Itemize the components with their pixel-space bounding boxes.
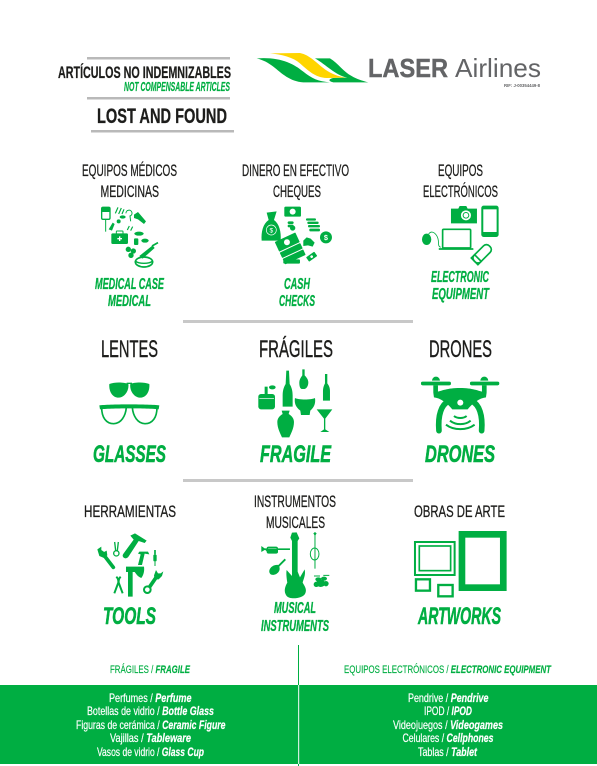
footer column: electronic equipment: Tablas / Tablet (418, 745, 478, 759)
footer column: electronic equipment: Pendrive / Pendrive (408, 691, 489, 705)
label: electronic equipment: ELECTRONIC (431, 269, 489, 286)
icon: tools (97, 533, 163, 597)
label: medical case (95, 276, 164, 310)
icon: fragile items (258, 369, 332, 437)
header title block: ARTÍCULOS NO INDEMNIZABLES (58, 63, 231, 82)
heading: equipos electrónicos: EQUIPOS (438, 161, 483, 180)
panel: cash (242, 161, 349, 310)
heading: instrumentos musicales: MUSICALES (266, 513, 325, 532)
footer column: electronic equipment: IPOD / IPOD (424, 704, 472, 718)
icon: drone (421, 377, 499, 431)
heading: dinero en efectivo: CHEQUES (273, 182, 321, 201)
footer column: fragile: Figuras de cerámica / Ceramic Figure (76, 718, 226, 732)
header title block (58, 57, 234, 132)
heading: equipos médicos: EQUIPOS MÉDICOS (82, 161, 177, 180)
panel: artworks (414, 502, 505, 630)
heading: dinero en efectivo (242, 161, 349, 201)
panel: tools (84, 502, 176, 630)
footer column: electronic equipment: Videojuegos / Videogames (393, 718, 503, 732)
label: drones: DRONES (425, 441, 495, 468)
heading: equipos médicos: MEDICINAS (100, 182, 159, 201)
panel: electronics (422, 161, 499, 303)
icon: glasses (99, 382, 159, 424)
label: cash checks (279, 276, 315, 310)
footer column: electronic equipment (344, 663, 552, 759)
label: cash checks: CASH (284, 276, 310, 293)
label: glasses: GLASSES (93, 441, 166, 468)
footer panel: lists (0, 645, 597, 766)
heading: equipos electrónicos (423, 161, 498, 201)
label: musical instruments: INSTRUMENTS (261, 618, 329, 635)
heading: drones: DRONES (429, 336, 492, 363)
footer column: fragile: FRÁGILES / FRAGILE (110, 663, 190, 676)
icon: electronics (422, 206, 499, 265)
panel: musical instruments (254, 492, 336, 635)
icon: money (262, 207, 332, 264)
heading: instrumentos musicales: INSTRUMENTOS (254, 492, 336, 511)
footer column: electronic equipment: Celulares / Cellphones (402, 731, 494, 745)
icon: musical instruments (261, 532, 329, 598)
heading: herramientas: HERRAMIENTAS (84, 502, 176, 521)
logo: LASER Airlines: LASER (368, 53, 448, 83)
logo: LASER Airlines: RIF: J-00354449-8 (504, 83, 540, 88)
logo: LASER Airlines: Airlines (455, 53, 541, 83)
label: medical case: MEDICAL CASE (95, 276, 164, 293)
heading: equipos electrónicos: ELECTRÓNICOS (423, 182, 498, 201)
header title block: NOT COMPENSABLE ARTICLES (124, 80, 230, 94)
heading: equipos médicos (82, 161, 177, 201)
footer column: electronic equipment: EQUIPOS ELECTRÓNICOS / ELECTRONIC EQUIPMENT (344, 663, 552, 676)
label: electronic equipment (431, 269, 490, 303)
panel: drones (421, 336, 499, 468)
icon: medical supplies (102, 207, 158, 267)
icon: money: $ (269, 227, 273, 234)
label: electronic equipment: EQUIPMENT (432, 286, 490, 303)
footer column: fragile: Perfumes / Perfume (109, 691, 192, 705)
heading: frágiles: FRÁGILES (259, 336, 333, 363)
label: medical case: MEDICAL (108, 293, 151, 310)
panel: fragile (258, 336, 333, 468)
label: fragile: FRAGILE (260, 441, 331, 468)
footer column: fragile: Botellas de vidrio / Bottle Glass (87, 704, 214, 718)
heading: instrumentos musicales (254, 492, 336, 532)
footer column: fragile (76, 663, 226, 759)
label: cash checks: CHECKS (279, 293, 315, 310)
panel: medical (82, 161, 177, 310)
footer column: fragile: Vajillas / Tableware (110, 731, 191, 745)
logo: LASER Airlines (257, 53, 541, 88)
label: artworks: ARTWORKS (417, 603, 501, 630)
heading: lentes: LENTES (101, 336, 158, 363)
icon: picture frames (415, 534, 503, 596)
heading: obras de arte: OBRAS DE ARTE (414, 502, 505, 521)
label: musical instruments: MUSICAL (274, 600, 316, 617)
icon: money: $ (324, 233, 328, 242)
label: tools: TOOLS (103, 603, 156, 630)
label: musical instruments (261, 600, 329, 635)
panel: glasses (93, 336, 166, 468)
footer column: fragile: Vasos de vidrio / Glass Cup (97, 745, 204, 759)
header title block: LOST AND FOUND (97, 105, 227, 128)
heading: dinero en efectivo: DINERO EN EFECTIVO (242, 161, 349, 180)
